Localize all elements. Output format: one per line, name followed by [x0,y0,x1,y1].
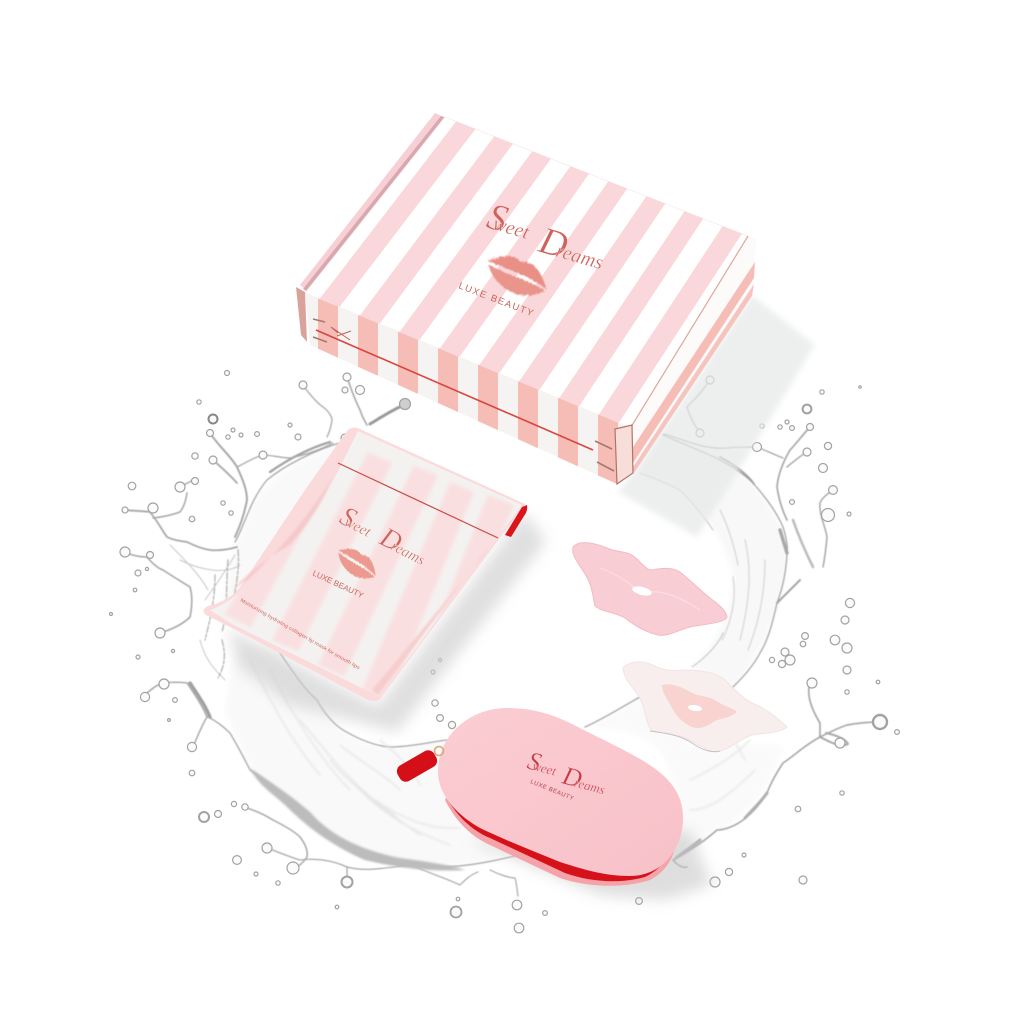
patch hole [688,704,702,712]
patch inner gel [662,684,737,728]
pouch title: Sweet [335,501,379,544]
box lid title [483,195,610,278]
zipper charm [394,746,444,784]
water band: lower right [585,697,783,860]
box lid brand: LUXE BEAUTY [457,281,535,319]
case title [524,746,610,800]
case brand: LUXE BEAUTY [529,779,574,802]
charm body [394,748,440,784]
patch highlight [600,568,700,610]
charm ring [434,746,444,756]
water band: lower left [225,646,500,866]
box lid title: Dreams [534,219,610,278]
box lid [305,117,750,428]
lip patch translucent [623,662,787,752]
water swirl [110,370,899,933]
water droplets [110,370,899,933]
water band: upper left [222,442,343,625]
lip patch pink [573,543,727,635]
pouch title: Dreams [374,521,433,572]
water streaks [250,660,755,845]
pouch stripes [210,431,522,697]
pouch title [335,501,433,572]
case lid [438,708,683,876]
shadow: case [470,830,712,900]
box [296,113,756,495]
pouch body [203,428,525,701]
shadow: pouch [228,512,546,732]
left tab slots [313,319,327,342]
case title: Sweet [524,746,561,782]
case zipper [441,770,676,881]
pouch right fold shading [372,545,490,695]
case [438,708,683,886]
box right side [617,236,756,484]
water band: upper right [640,435,787,687]
pouch fine print: Moisturizing hydrating collagen lip mask for smooth lips [239,598,361,672]
case base [445,790,675,886]
box left flap [300,113,446,292]
case title: Dreams [558,761,610,800]
pouch left fold shading [232,477,333,590]
box lid lips [481,250,553,302]
box front [305,290,631,495]
pouch brand: LUXE BEAUTY [311,569,365,600]
patch bottom edge [650,731,720,752]
water rim lines [125,377,880,896]
box lid title: Sweet [483,195,536,248]
pouch tear line [338,463,498,538]
shadow: box [618,295,815,537]
pouch red tab [505,505,527,537]
patch mouth hole [631,585,653,597]
right tab slots [595,441,614,471]
red tear strip [316,330,593,450]
pouch lips [331,543,382,584]
scissors mark [331,327,351,340]
box left end [296,287,307,342]
thick shadow along lower rim [250,768,465,871]
box corner flap [615,425,633,484]
pouch [204,428,528,702]
